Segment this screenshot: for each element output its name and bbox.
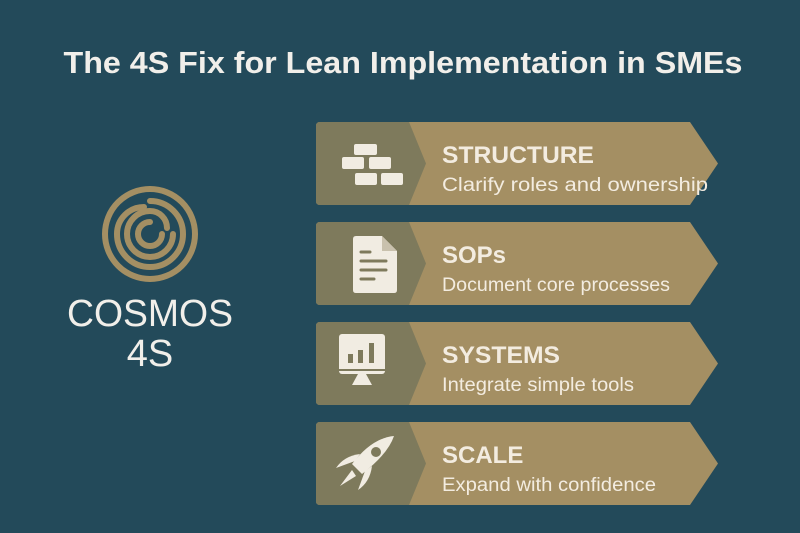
logo: cosmos 4s — [67, 189, 233, 375]
icon: spiral — [105, 189, 195, 279]
panel: systems: Integrate simple tools — [442, 375, 634, 396]
icon: rocket — [336, 436, 394, 490]
panel: sops — [316, 222, 718, 305]
panel: sops: SOPs — [442, 242, 506, 269]
panel: scale — [316, 422, 718, 505]
panel: systems — [316, 322, 718, 405]
panel: sops: Document core processes — [442, 275, 670, 296]
panel: scale: Expand with confidence — [442, 475, 656, 496]
icon: monitor chart — [339, 334, 385, 385]
icon: document — [353, 236, 397, 293]
panel: structure: Clarify roles and ownership — [442, 175, 708, 196]
logo: cosmos 4s: 4S — [127, 333, 173, 375]
panel: scale: SCALE — [442, 442, 523, 469]
panel: structure: STRUCTURE — [442, 142, 594, 169]
icon: bricks — [342, 144, 403, 185]
title: The 4S Fix for Lean Implementation in SMEs — [64, 45, 742, 80]
panel: systems: SYSTEMS — [442, 342, 560, 369]
logo text: COSMOS — [67, 293, 233, 335]
panel: structure — [316, 122, 718, 205]
